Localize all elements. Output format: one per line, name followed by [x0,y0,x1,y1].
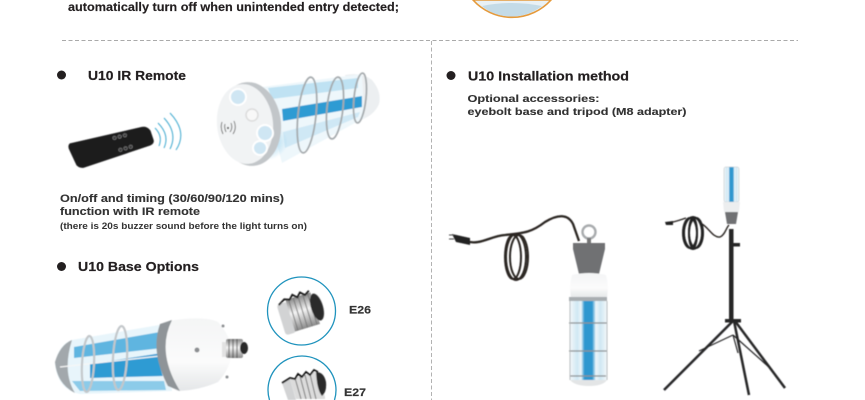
end cap [345,74,380,121]
heading: U10 Installation method [468,68,629,84]
panel: installation method [446,68,785,395]
E27 base option [268,356,366,400]
centre tube [282,96,362,121]
eyebolt [582,226,596,238]
panel: IR remote [57,68,380,231]
icon: remote control: ⏻ ⏻ ⏻ [118,144,134,154]
bullet [57,262,66,271]
description text: (there is 20s buzzer sound before the light turns on) [60,221,307,231]
description text [60,193,307,231]
label: E27 [344,387,366,399]
centre tube [90,353,164,378]
panel: base options [55,259,371,400]
tripod lamp with cord [664,167,785,395]
bullet [57,70,66,80]
screw thread [222,342,228,357]
tripod hub [725,319,741,322]
power cord [465,216,579,242]
cord [668,218,729,237]
gray socket [573,243,605,274]
bullet [446,71,456,80]
lamp with screw base [55,318,248,394]
top feature text: automatically turn off when unintended entry detected; [68,2,399,14]
white base [158,318,232,391]
eyebolt hanging lamp with cord [449,216,608,386]
accessories text [468,93,686,118]
vertical section divider [430,41,432,400]
heading: U10 Base Options [78,259,199,274]
cord coil [505,234,528,280]
lower tube [283,112,360,148]
cage rings [294,73,369,154]
top tube [74,332,162,358]
front face [215,79,285,169]
metal end cap [55,340,75,393]
horizontal section divider [62,40,798,42]
cord coil [683,217,703,249]
cage body [262,74,364,163]
tripod legs [664,321,785,395]
accessories text: eyebolt base and tripod (M8 adapter) [468,106,686,118]
tripod pole [729,229,734,321]
cropped orange circle illustration [473,0,551,17]
white housing [570,273,608,298]
lamp with IR receiver [213,73,380,169]
icon: remote control: ⏻ ⏻ ⏻ [112,133,128,142]
heading: U10 IR Remote [88,68,186,83]
top tube [268,78,358,99]
icon: remote control [69,127,153,167]
description text: On/off and timing (30/60/90/120 mins) [60,193,284,205]
cage body [55,324,172,394]
icon: infrared signal waves [155,113,181,150]
plug [452,234,470,245]
label: E26 [349,304,371,316]
UV tube cage [570,301,607,380]
cage rings [81,326,129,392]
plug [665,221,673,225]
receiver icon [221,121,235,134]
lower tube [72,381,166,391]
E26 base option [268,277,371,345]
mini lamp [724,167,739,202]
description text: function with IR remote [60,206,200,218]
accessories text: Optional accessories: [468,93,600,105]
